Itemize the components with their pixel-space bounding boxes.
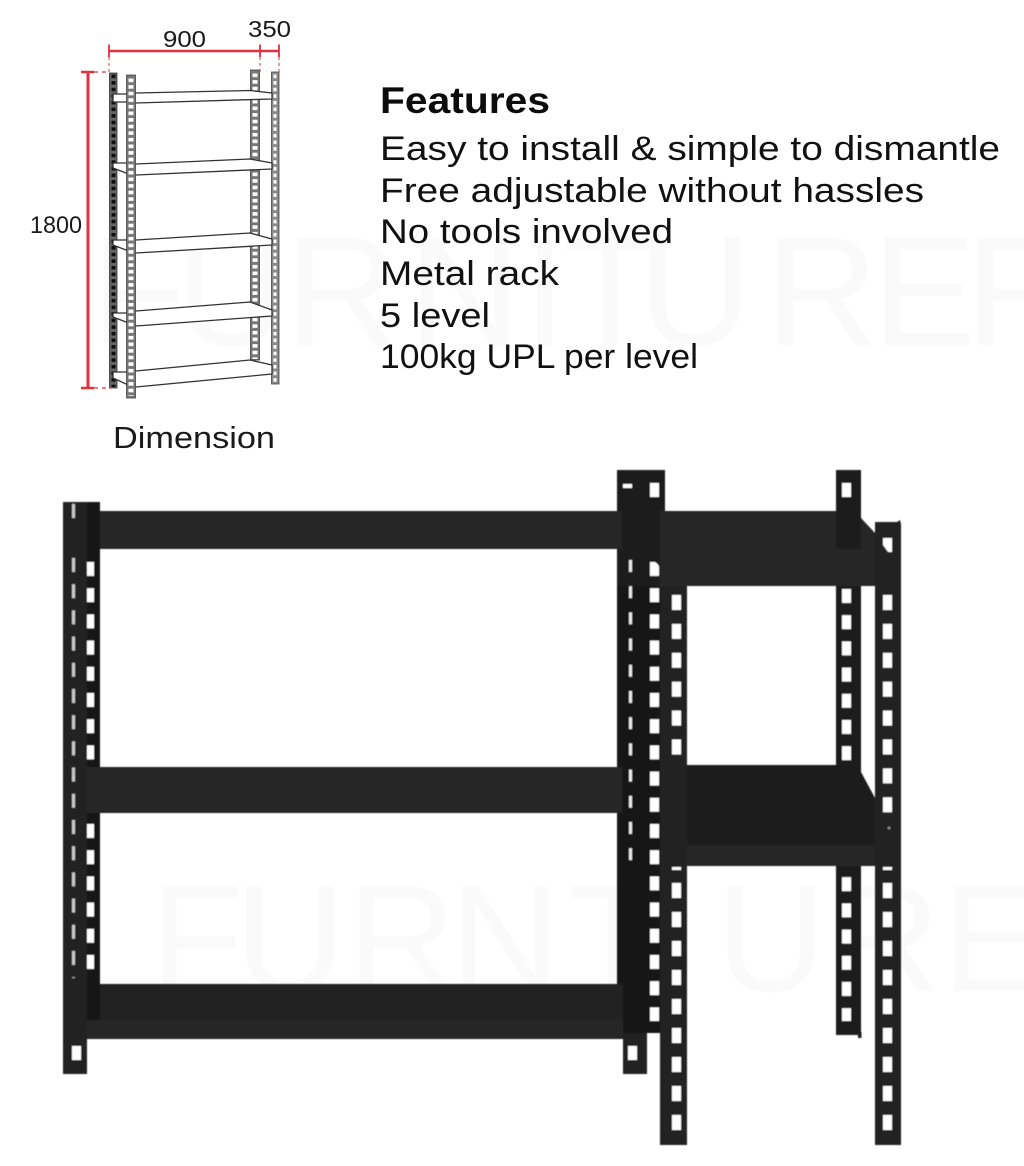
darker post sections over shelves <box>836 511 861 845</box>
label: 900: 900 <box>163 26 206 52</box>
right rack: top shelf <box>660 511 875 586</box>
right rack: front-right post <box>875 520 901 1145</box>
right rack: middle shelf <box>687 765 875 866</box>
right rack: front-left post <box>660 586 687 1145</box>
long rack: top shelf <box>100 511 622 549</box>
right-side rear post <box>836 470 862 1038</box>
feature list: Free adjustable without hassles <box>380 172 924 210</box>
left-side upright of the long rack <box>63 502 100 1074</box>
feature list: No tools involved <box>380 213 673 251</box>
centre shared uprights <box>617 470 665 1074</box>
label: 350: 350 <box>248 16 291 42</box>
watermark: lower FURNITURE: FURNITURE <box>150 854 1024 1024</box>
rear posts <box>110 70 279 388</box>
five shelves <box>113 90 272 387</box>
long rack: middle shelf <box>87 767 622 813</box>
black metal rack product image <box>63 470 901 1145</box>
features text block <box>380 80 1000 376</box>
long rack: bottom shelf <box>87 984 623 1039</box>
feature list <box>380 130 1000 376</box>
dimension diagram <box>30 16 291 455</box>
feature list: 100kg UPL per level <box>380 338 698 376</box>
heading: Features: Features <box>380 80 550 121</box>
caption: Dimension: Dimension <box>113 420 275 455</box>
front post <box>126 75 136 398</box>
small rack line drawing <box>110 70 279 398</box>
feature list: Metal rack <box>380 255 560 293</box>
red dimension lines <box>81 44 279 388</box>
feature list: Easy to install & simple to dismantle <box>380 130 1000 168</box>
label: 1800: 1800 <box>30 212 82 239</box>
feature list: 5 level <box>380 297 490 335</box>
